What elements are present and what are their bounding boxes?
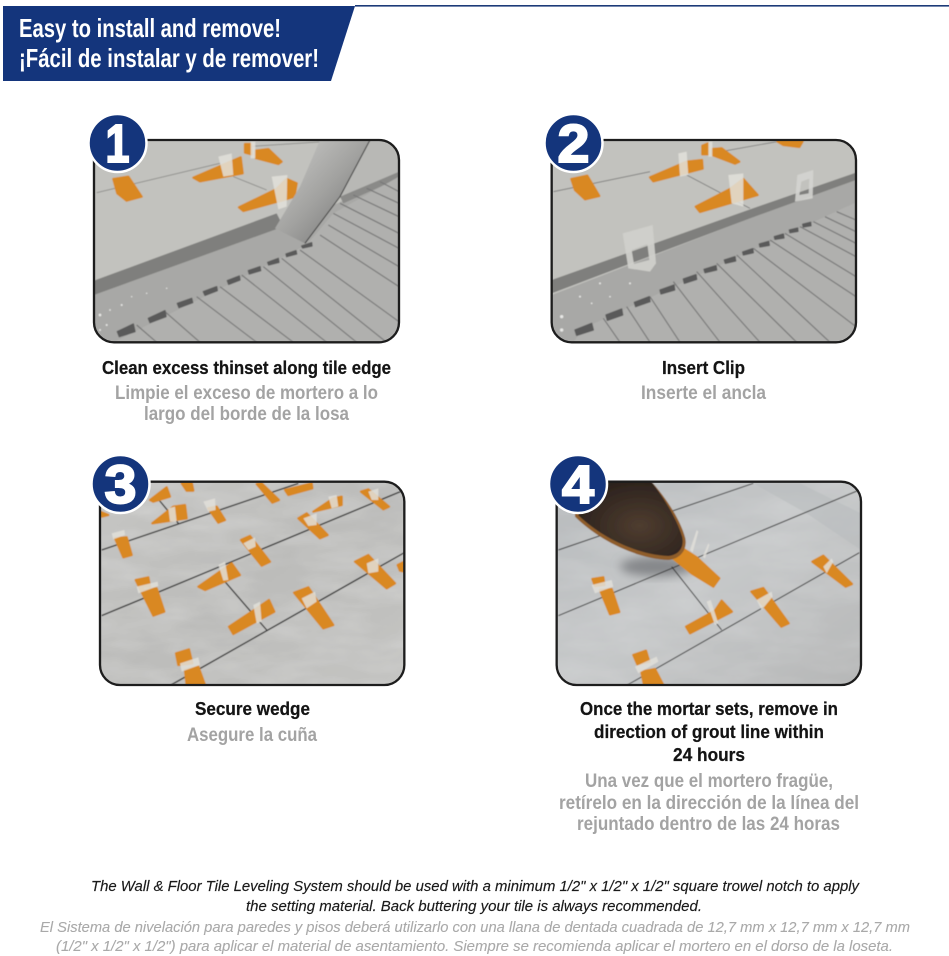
panel: step 2 photo	[552, 140, 856, 342]
footnote: English: the setting material. Back buttering your tile is always recommended.	[246, 898, 702, 915]
caption: step 3: Secure wedge	[195, 698, 310, 719]
caption: step 3: Asegure la cuña	[187, 724, 317, 746]
footnote: English: The Wall & Floor Tile Leveling System should be used with a minimum 1/2" x 1/2" x 1/2" square trowel notch to apply	[91, 878, 860, 895]
caption: step 4: rejuntado dentro de las 24 horas	[577, 813, 840, 835]
clip	[795, 170, 813, 202]
caption: step 4	[559, 698, 859, 835]
footnote: Spanish: (1/2" x 1/2" x 1/2") para aplicar el material de asentamiento. Siempre se recomienda aplicar el mortero en el dorso de la loseta.	[56, 938, 893, 955]
heading: Spanish: ¡Fácil de instalar y de remover!	[19, 43, 319, 73]
wedge	[696, 173, 758, 212]
clips	[592, 530, 833, 673]
icon: boot	[575, 480, 686, 560]
trowel	[275, 140, 370, 243]
wedge	[650, 152, 703, 181]
caption: step 3	[187, 698, 317, 746]
footnote: Spanish: El Sistema de nivelación para paredes y pisos deberá utilizarlo con una llana de dentada cuadrada de 12,7 mm x 12,7 mm x 12,7 mm	[40, 919, 910, 936]
caption: step 4: Once the mortar sets, remove in	[580, 698, 838, 719]
badge: number 2: 2	[558, 114, 590, 174]
caption: step 4: Una vez que el mortero fragüe,	[585, 770, 833, 792]
caption: step 1: Clean excess thinset along tile edge	[102, 357, 391, 378]
badge: number 4	[549, 455, 607, 515]
footnote: Spanish	[40, 919, 910, 955]
wedge	[113, 177, 142, 201]
badge: number 4: 4	[562, 455, 594, 515]
caption: step 2: Inserte el ancla	[641, 382, 766, 404]
badge: number 2	[544, 114, 602, 174]
caption: step 1: largo del borde de la losa	[144, 403, 349, 425]
wedge	[702, 142, 739, 164]
header banner	[3, 5, 949, 81]
heading: English: Easy to install and remove!	[19, 13, 281, 43]
caption: step 4: 24 hours	[673, 744, 745, 765]
wedge	[193, 153, 243, 181]
badge: number 1	[88, 114, 146, 174]
wedge	[239, 175, 297, 211]
caption: step 4: retírelo en la dirección de la línea del	[559, 792, 859, 814]
wedge	[571, 176, 599, 199]
wedges	[100, 483, 404, 685]
clip	[623, 225, 656, 272]
caption: step 4: direction of grout line within	[594, 721, 824, 742]
caption: step 2: Insert Clip	[662, 357, 745, 378]
clips	[112, 488, 378, 672]
caption: step 1: Limpie el exceso de mortero a lo	[115, 382, 378, 404]
caption: step 2	[641, 357, 766, 404]
badge: number 3	[92, 455, 150, 515]
panel: step 1 photo	[94, 140, 399, 342]
wedge	[245, 142, 282, 164]
wedges	[592, 545, 852, 685]
footnote: English	[91, 878, 860, 915]
panel: step 3 photo	[100, 482, 404, 685]
caption: step 1	[102, 357, 391, 425]
panel: step 4 photo	[557, 480, 861, 685]
badge: number 1: 1	[106, 114, 130, 174]
badge: number 3: 3	[104, 455, 136, 515]
